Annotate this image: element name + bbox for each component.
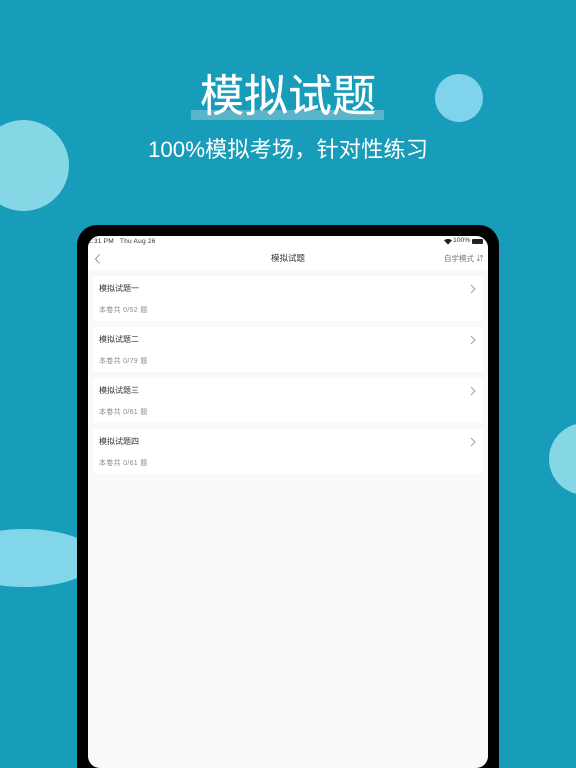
card 2 name: 模拟试题二 <box>99 335 139 344</box>
card 4 chevron <box>470 438 476 446</box>
card 3 name: 模拟试题三 <box>99 386 139 395</box>
battery percent: 100% <box>453 237 470 244</box>
decorative circle: top right <box>435 74 483 122</box>
card 1 chevron <box>470 284 476 294</box>
card 1 progress: 本卷共 0/52 题 <box>99 306 148 314</box>
exam card 1 <box>93 276 483 321</box>
card 3 chevron <box>470 386 476 396</box>
tablet screen <box>88 236 488 768</box>
screen title: 模拟试题 <box>271 253 305 263</box>
exam card 4 <box>93 429 483 474</box>
tablet device frame <box>77 225 499 768</box>
card 1 name: 模拟试题一 <box>99 284 139 293</box>
decorative circle: right edge <box>549 423 576 495</box>
card 4 progress: 本卷共 0/61 题 <box>99 460 148 466</box>
card 4 name: 模拟试题四 <box>99 437 139 446</box>
exam card 3 <box>93 378 483 423</box>
icon: back chevron <box>95 254 100 264</box>
decorative circle: left <box>0 120 69 211</box>
navigation and status header <box>88 236 488 270</box>
title underline highlight <box>191 110 384 120</box>
title: 模拟试题 <box>200 72 376 121</box>
card 3 progress: 本卷共 0/61 题 <box>99 408 148 416</box>
card 2 progress: 本卷共 0/79 题 <box>99 358 148 364</box>
icon: wifi <box>444 238 452 244</box>
status bar wifi and battery <box>444 237 483 244</box>
self-study mode toggle: 自学模式 ⇵ <box>444 254 484 263</box>
card 2 chevron <box>470 336 476 344</box>
exam card 2 <box>93 327 483 372</box>
subtitle: 100%模拟考场，针对性练习 <box>148 137 428 162</box>
icon: battery <box>472 239 483 244</box>
decorative ellipse: lower left <box>0 529 97 587</box>
status bar time: 2:31 PM Thu Aug 26 <box>88 238 156 245</box>
